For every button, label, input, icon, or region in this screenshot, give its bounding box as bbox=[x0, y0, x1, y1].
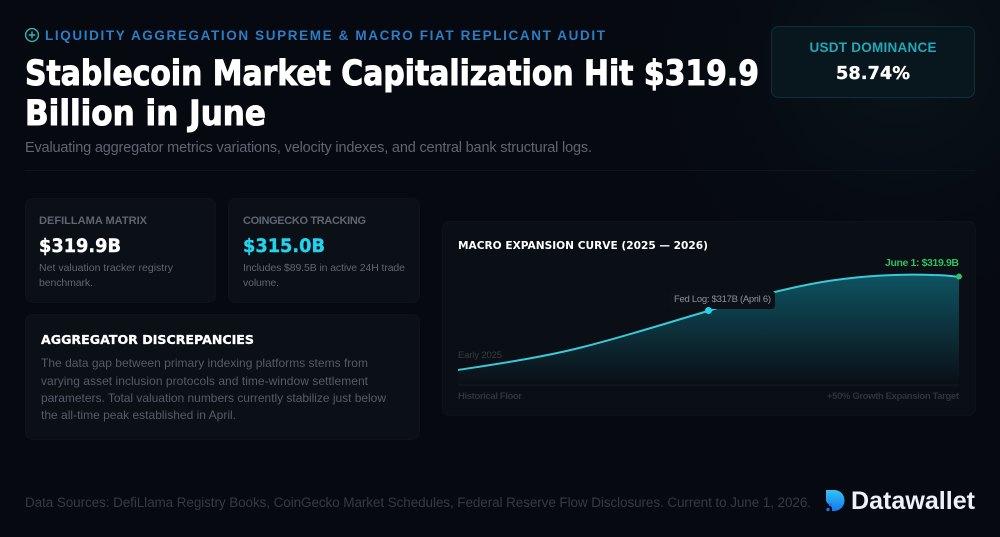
chart baseline bbox=[458, 384, 959, 386]
card note: Includes $89.5B in active 24H trade bbox=[243, 262, 405, 274]
panel body text: The data gap between primary indexing platforms stems from bbox=[41, 356, 368, 370]
panel: macro expansion curve bbox=[442, 222, 976, 416]
card label: COINGECKO TRACKING bbox=[243, 215, 366, 227]
panel body text: parameters. Total valuation numbers currently stabilize just below bbox=[41, 391, 386, 405]
icon: logo mark bbox=[826, 490, 844, 511]
panel body text: the all-time peak established in April. bbox=[41, 408, 236, 422]
card note: Net valuation tracker registry bbox=[39, 262, 174, 274]
card value: $319.9B bbox=[39, 235, 121, 257]
eyebrow text: LIQUIDITY AGGREGATION SUPREME & MACRO FIAT REPLICANT AUDIT bbox=[45, 28, 606, 43]
logo: Datawallet bbox=[826, 487, 976, 515]
point: Fed log marker bbox=[705, 307, 712, 314]
panel heading: AGGREGATOR DISCREPANCIES bbox=[41, 332, 254, 347]
dominance label: USDT DOMINANCE bbox=[810, 40, 936, 55]
card note: volume. bbox=[243, 277, 279, 289]
point: June 1 marker bbox=[956, 274, 962, 280]
callout: June 1: June 1: $319.9B bbox=[885, 257, 959, 269]
dominance value: 58.74% bbox=[836, 63, 910, 84]
chart: area under curve bbox=[458, 275, 959, 385]
title: Stablecoin Market Capitalization Hit $319.9 bbox=[25, 54, 759, 94]
footer sources: Data Sources: DefiLlama Registry Books, CoinGecko Market Schedules, Federal Reserve Flow Disclosures. Current to June 1, 2026. bbox=[25, 495, 811, 510]
card note bbox=[243, 262, 405, 289]
panel: DefiLlama matrix bbox=[26, 198, 216, 302]
title: Billion in June bbox=[25, 94, 266, 134]
chart: line bbox=[458, 275, 959, 370]
callout: Fed log bbox=[670, 291, 775, 309]
label: growth target: +50% Growth Expansion Target bbox=[827, 391, 960, 402]
header divider bbox=[25, 170, 975, 171]
label: early 2025: Early 2025 bbox=[458, 350, 502, 361]
logo wordmark: Datawallet bbox=[851, 487, 976, 515]
title bbox=[25, 54, 759, 134]
icon: plus in circle bbox=[26, 29, 38, 41]
label: historical floor: Historical Floor bbox=[458, 391, 522, 402]
eyebrow tag line bbox=[26, 28, 606, 43]
panel body text bbox=[41, 356, 386, 422]
chart heading: MACRO EXPANSION CURVE (2025 — 2026) bbox=[458, 240, 708, 252]
card note bbox=[39, 262, 174, 289]
panel: CoinGecko tracking bbox=[228, 198, 420, 302]
panel body text: varying asset inclusion protocols and time-window settlement bbox=[41, 374, 369, 388]
card note: benchmark. bbox=[39, 277, 93, 289]
card value: $315.0B bbox=[243, 235, 325, 257]
card label: DEFILLAMA MATRIX bbox=[39, 215, 148, 227]
callout: Fed log: Fed Log: $317B (April 6) bbox=[674, 294, 771, 305]
panel: USDT dominance bbox=[772, 26, 974, 98]
subtitle: Evaluating aggregator metrics variations, velocity indexes, and central bank structural logs. bbox=[25, 140, 592, 156]
panel: aggregator discrepancies bbox=[26, 314, 420, 440]
